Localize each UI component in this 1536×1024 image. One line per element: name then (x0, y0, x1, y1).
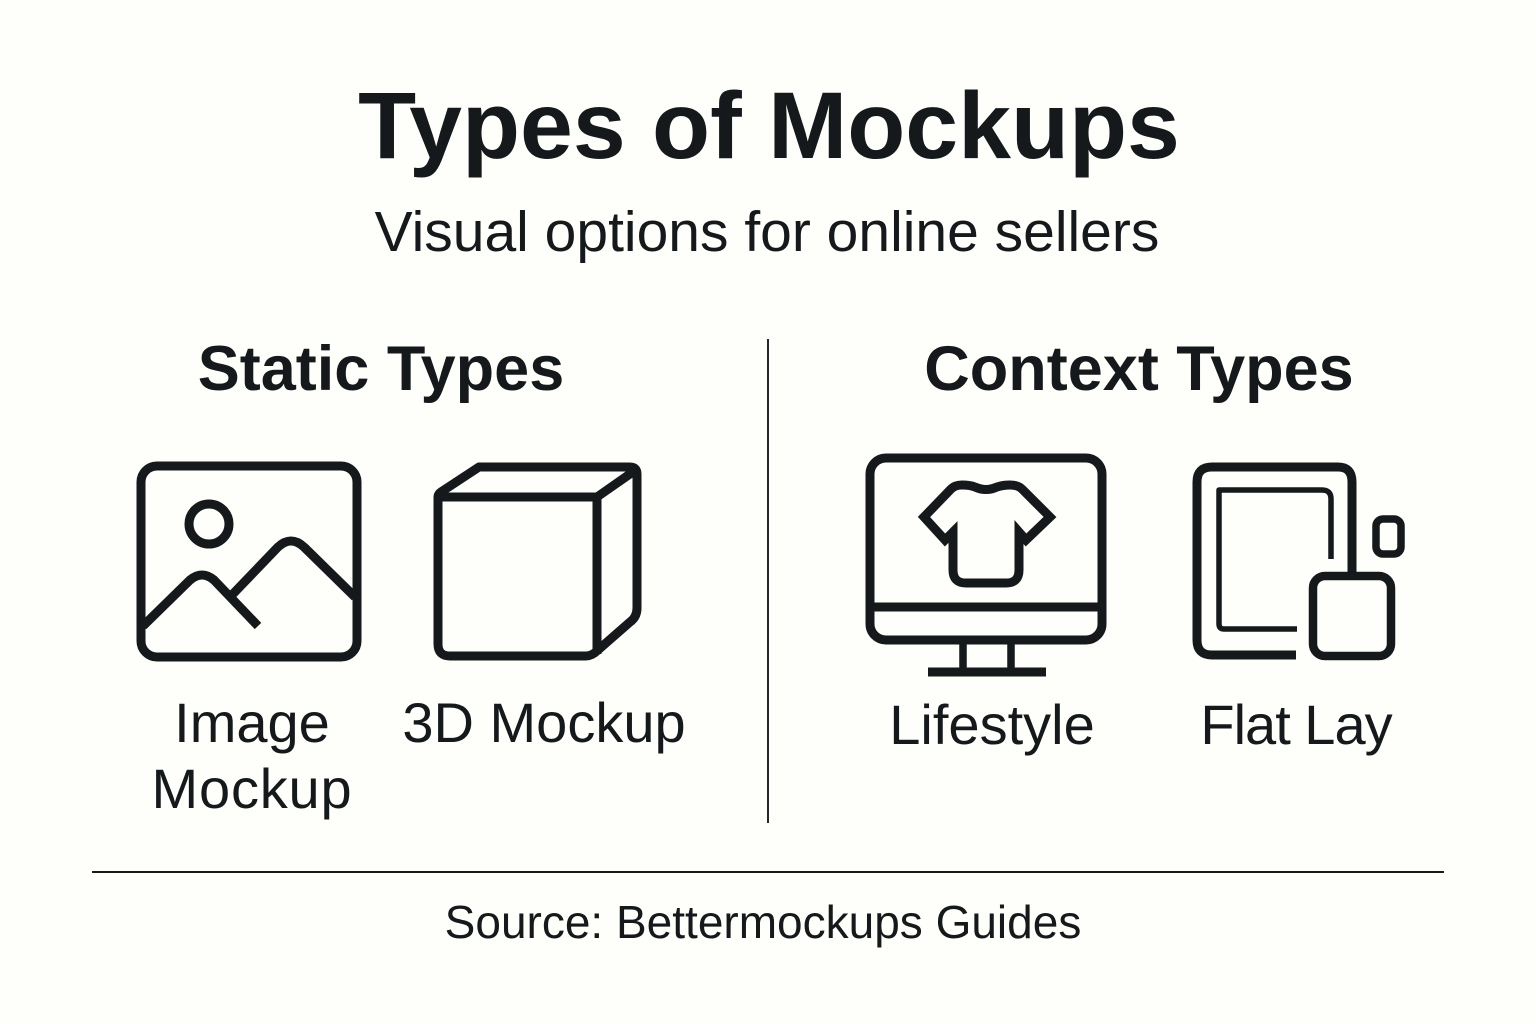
label: image mockup: Mockup (152, 757, 352, 820)
label: lifestyle: Lifestyle (889, 693, 1095, 756)
label: 3D mockup: 3D Mockup (402, 691, 686, 754)
subtitle: Visual options for online sellers (375, 200, 1159, 264)
title: Types of Mockups (358, 73, 1180, 179)
heading: context types: Context Types (924, 334, 1354, 404)
label: flat lay: Flat Lay (1200, 693, 1392, 756)
heading: static types: Static Types (198, 334, 564, 404)
vertical divider (767, 339, 769, 823)
icon: flat lay (1197, 467, 1401, 656)
footer rule (92, 871, 1444, 873)
icon: 3D box (438, 467, 637, 656)
label: image mockup (152, 691, 352, 820)
icon: image mockup (141, 466, 357, 657)
label: image mockup: Image (174, 691, 330, 754)
icon: lifestyle monitor with shirt (870, 458, 1102, 672)
source note: Source: Bettermockups Guides (445, 896, 1081, 948)
